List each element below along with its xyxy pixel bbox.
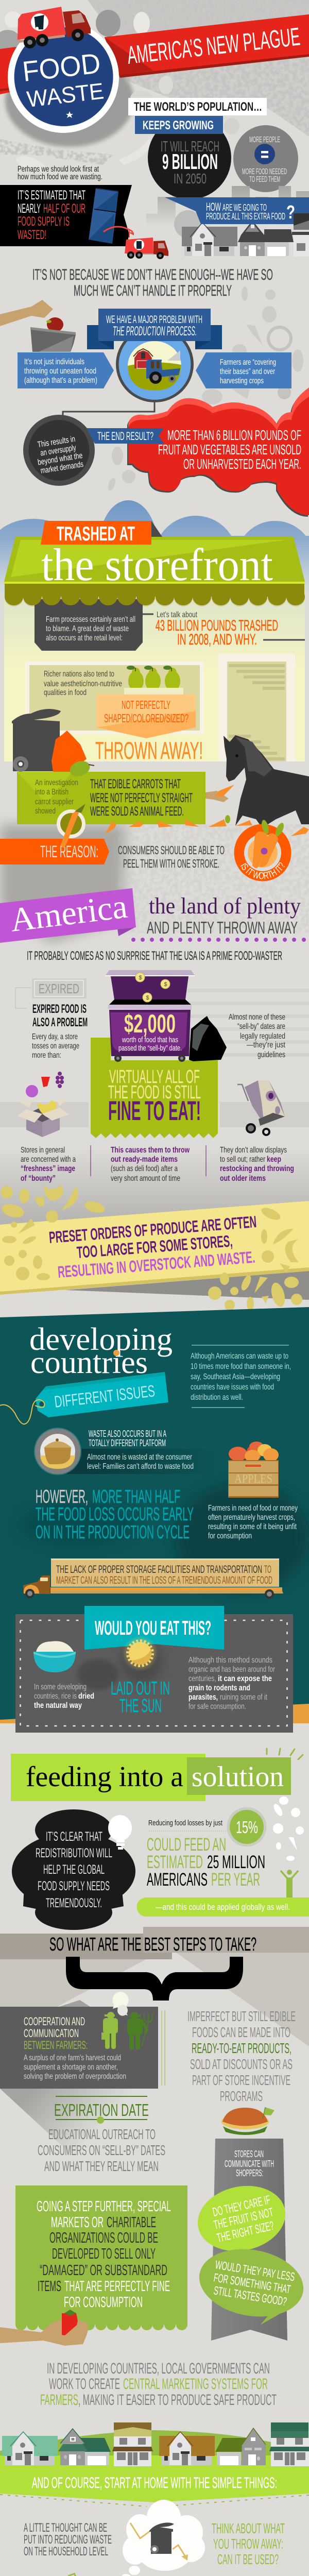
tag: the end result	[87, 428, 164, 444]
text: richer nations: qualities in food	[44, 688, 87, 697]
speech bubble: how are we going to produce: HOW	[206, 200, 221, 213]
stat: 15 percent could feed 25 million: PER YEAR	[211, 1870, 260, 1890]
panel: fine to eat: VIRTUALLY ALL OF	[109, 1066, 200, 1087]
section: carrots	[0, 709, 309, 947]
text: however, more than half: MORE THAN HALF	[92, 1486, 180, 1507]
panel: nearly half of food wasted: HALF OF OUR	[43, 201, 85, 216]
panel: carrots sold as animal feed: carrot supplier	[35, 798, 74, 806]
black circle: 9 billion	[148, 116, 231, 199]
stat: 15 percent could feed 25 million	[147, 1807, 267, 1890]
grey circle: more people equals more food: MORE PEOPLE	[249, 135, 280, 144]
text: rice dried	[34, 1683, 94, 1710]
tag: not perfectly shaped: NOT PERFECTLY	[122, 698, 170, 711]
grey circle: more people equals more food: TO FEED THEM	[249, 175, 280, 184]
text: however, more than half	[36, 1486, 194, 1543]
heading: trashed at	[41, 521, 162, 545]
stat: 15 percent could feed 25 million: 25 MILLION	[207, 1852, 265, 1872]
block: consumer level	[34, 1428, 217, 1475]
text: laid out in the sun	[111, 1677, 170, 1716]
stamp: expired: EXPIRED	[39, 981, 79, 996]
column: ready-made items: out ready-made items	[111, 1155, 178, 1164]
text: sell-by dates: guidelines	[258, 1050, 285, 1059]
text: consumers should	[118, 843, 225, 870]
text: central marketing systems: WORK TO CREATE	[49, 2376, 120, 2393]
text: expired food is also a problem: EXPIRED FOOD IS	[32, 1002, 87, 1016]
panel: special markets: CHARITABLE	[107, 2214, 156, 2231]
grey circle: more people equals more food	[233, 125, 298, 192]
text: expiration date: CONSUMERS ON “SELL-BY” DATES	[38, 2142, 165, 2158]
panel: nearly half of food wasted: WASTED!	[18, 228, 46, 242]
heading: feeding into a solution: solution	[192, 1761, 284, 1793]
head with lightbulb: FOOD SUPPLY NEEDS	[38, 1879, 110, 1893]
badge: is it worth it: IS IT WORTH IT?	[240, 862, 285, 879]
text: farmers in need: for consumption	[208, 1532, 252, 1540]
hills and houses	[0, 2422, 309, 2502]
badge: food waste	[8, 22, 119, 133]
text: however, more than half: HOWEVER,	[36, 1486, 88, 1507]
text: organic method: for safe consumption.	[188, 1702, 246, 1711]
text: perhaps we should look first: Perhaps we should look first at	[18, 165, 99, 174]
heading: developing countries: countries	[30, 1345, 148, 1380]
panel: would you eat this	[15, 1606, 293, 1733]
stat: 15 percent could feed 25 million: COULD FEED AN	[147, 1835, 226, 1855]
section: developing countries	[0, 1307, 309, 1733]
tag: not perfectly shaped	[97, 694, 196, 738]
panel: fine to eat: FINE TO EAT!	[108, 1096, 201, 1126]
house 1	[182, 223, 237, 256]
icon: pears in crate	[124, 666, 183, 697]
house: green two-storey	[269, 2422, 309, 2466]
heading: feeding into a solution: feeding into a	[26, 1761, 183, 1793]
text: sell-by dates: Almost none of these	[229, 1013, 285, 1022]
panel: nearly half of food wasted	[0, 185, 134, 246]
panel: special markets: GOING A STEP FURTHER, SPECIAL	[37, 2198, 171, 2215]
icons: white food silhouettes	[272, 1797, 304, 1861]
sign: farm processes: Farm processes certainly aren’t all	[46, 615, 135, 624]
icon: garbage truck	[18, 7, 91, 48]
column: freshness image: “freshness” image	[21, 1164, 75, 1173]
banner: stores can communicate	[192, 2107, 309, 2341]
icon: dumpster	[106, 970, 195, 1062]
grey stripes	[187, 989, 309, 1057]
block: consumer level: WASTE ALSO OCCURS BUT IN A	[89, 1429, 166, 1439]
panel: cooperation	[0, 1992, 158, 2089]
coins	[135, 973, 170, 1002]
banner: stores can communicate: STORES CAN	[234, 2149, 264, 2159]
block: consumer level: level: Families can’t afford to waste food	[87, 1462, 194, 1471]
icons: leftovers food	[34, 2573, 279, 2576]
house: brown	[159, 2431, 215, 2465]
text: a little thought: PUT INTO REDUCING WASTE	[24, 2533, 112, 2547]
text: laid out in the sun: THE SUN	[119, 1695, 162, 1716]
text: sell-by dates: —they’re just	[247, 1041, 285, 1049]
tag: different issues	[0, 1372, 168, 1424]
column: ready-made items: very short amount of time	[111, 1174, 180, 1183]
panel: it's not just individuals: It’s not just individuals	[24, 358, 84, 366]
text: richer nations: value aesthetic/non-nutritive	[44, 680, 122, 688]
panel: special markets: ITEMS	[38, 2278, 61, 2295]
text: expiration date: EXPIRATION DATE	[54, 2100, 149, 2120]
text: sell-by dates: legally regulated	[240, 1032, 285, 1041]
red cloud: end result	[127, 387, 309, 517]
heading: feeding into a solution	[11, 1749, 303, 1801]
head with lightbulb: IT’S CLEAR THAT	[46, 1829, 102, 1844]
text: rice dried: dried	[78, 1692, 94, 1701]
badge title	[21, 47, 105, 118]
panel: carrots sold as animal feed: WERE NOT PERFECTLY STRAIGHT	[90, 791, 193, 805]
house: grey with olive garage	[215, 2428, 266, 2465]
black circle: 9 billion: IN 2050	[174, 171, 207, 187]
text: organic method: it can expose the	[218, 1674, 272, 1683]
panel: farmers covering their bases: Farmers are “covering	[220, 358, 276, 367]
text: organic method: ruining some of it	[220, 1693, 267, 1702]
circle: oversupply: an oversupply	[40, 444, 77, 458]
text: richer nations	[44, 670, 122, 697]
house: mint	[2, 2431, 58, 2465]
clouds behind the store	[0, 500, 309, 602]
text: although Americans: say, Southeast Asia—developing	[191, 1372, 280, 1381]
text: a little thought: A LITTLE THOUGHT CAN BE	[24, 2521, 107, 2535]
text: rice dried: countries, rice is	[34, 1692, 77, 1701]
icon: bowl of rice	[33, 1641, 76, 1672]
icon: small garbage truck	[125, 238, 168, 259]
heading: land of plenty	[131, 893, 306, 942]
ribbon: America: America	[8, 888, 129, 939]
text: organic method: organic and has been around for	[188, 1665, 275, 1674]
text: although Americans: distribution as well.	[191, 1393, 243, 1402]
panel: cooperation: solving the problem of overproduction	[24, 2072, 126, 2081]
section: feeding into a solution	[0, 1749, 309, 2576]
banner: major problem with production	[87, 309, 222, 349]
icon: horse	[224, 735, 309, 828]
icon: bin with orange bag	[12, 709, 87, 772]
icon: dumpster: passed the “sell-by” date.	[118, 1044, 182, 1053]
icon: person	[281, 1870, 298, 1897]
stat: 15 percent could feed 25 million: Reducing food losses by just	[148, 1819, 223, 1827]
text: organic method: Although this method sounds	[188, 1656, 272, 1665]
grunge texture	[0, 0, 309, 165]
text: rice dried: In some developing	[34, 1683, 87, 1691]
truck: lack of storage	[23, 1558, 283, 1599]
text: imperfect but edible: PROGRAMS	[220, 2088, 263, 2104]
house: tan two-storey	[112, 2422, 153, 2466]
stat: 15 percent could feed 25 million: AMERICANS	[147, 1870, 208, 1890]
icon: trash bag	[189, 1016, 227, 1061]
stat: 15 percent could feed 25 million: 15%	[236, 1818, 258, 1837]
panel: nearly half of food wasted: NEARLY	[18, 201, 41, 216]
icon: crate of apples	[228, 1442, 279, 1498]
pill: applied globally	[137, 1897, 309, 1917]
column: restocking: out older items	[220, 1174, 266, 1183]
truck: lack of storage: TO	[264, 1564, 271, 1575]
icon: dumpster: worth of food that has	[122, 1036, 178, 1044]
head with lightbulb: REDISTRIBUTION WILL	[36, 1846, 112, 1860]
heading: trashed at: TRASHED AT	[57, 523, 135, 545]
block: consumer level: Almost none is wasted at the consumer	[87, 1453, 192, 1462]
text: laid out in the sun: LAID OUT IN	[111, 1677, 170, 1699]
speech bubble: how are we going to produce: ?	[286, 201, 295, 223]
text: perhaps we should look first	[18, 165, 102, 181]
panel: it's not just individuals: (although that’s a problem)	[24, 376, 97, 385]
text: a little thought: ON THE HOUSEHOLD LEVEL	[24, 2545, 108, 2558]
window: right	[218, 654, 295, 761]
section: the storefront	[0, 500, 309, 764]
panel: special markets: ORGANIZATIONS COULD BE	[49, 2230, 158, 2246]
panel: fine to eat: THE FOOD IS STILL	[108, 1081, 201, 1103]
dashed lines	[0, 2495, 309, 2506]
section: America	[0, 888, 309, 1236]
text: although Americans: countries have issues with food	[191, 1383, 274, 1392]
tag: different issues: DIFFERENT ISSUES	[54, 1381, 156, 1411]
chevron backdrop	[0, 1947, 309, 2046]
icon: fridge	[89, 188, 134, 244]
icon: pot	[34, 1428, 81, 1475]
text: perhaps we should look first: how much food we are wasting.	[18, 173, 102, 181]
icon: pie	[221, 2107, 274, 2135]
badge title: WASTE	[26, 78, 105, 112]
text: organic method: parasites,	[188, 1693, 218, 1702]
icon: curly brace	[66, 1957, 243, 2001]
sign: farm processes: also occurs at the retail level:	[46, 634, 123, 642]
stat: 15 percent could feed 25 million: ESTIMATED	[147, 1852, 203, 1872]
icon: hand dropping apple into bin	[0, 300, 76, 352]
coins: $	[139, 975, 142, 981]
connector lines	[63, 402, 154, 416]
icon: crate of apples: APPLES	[234, 1472, 272, 1486]
ribbon: America's new plague	[0, 14, 309, 94]
skyline and houses	[146, 186, 309, 257]
text: organic method: grain to rodents and	[188, 1684, 250, 1692]
tag: the end result: THE END RESULT?	[97, 430, 153, 443]
column: restocking: keep	[267, 1155, 281, 1164]
text: expired food is also a problem: tosses on average	[32, 1042, 79, 1050]
text: organic method	[188, 1656, 275, 1711]
coins: $	[146, 995, 149, 1001]
teal background	[0, 1704, 309, 1723]
panel: special markets	[0, 2185, 187, 2346]
badge: is it worth it	[234, 820, 291, 881]
sign: farm processes	[35, 599, 143, 651]
heading: land of plenty: the land of plenty	[149, 893, 301, 919]
panel: farmers covering their bases: harvesting crops	[220, 377, 264, 385]
text: central marketing systems: FARMERS	[40, 2392, 78, 2409]
black circle: 9 billion: 9 BILLION	[162, 149, 218, 174]
icon: hand feeding carrot	[205, 785, 234, 802]
text: $2,000: $2,000	[124, 1009, 176, 1038]
stat: 43 billion pounds	[143, 611, 305, 648]
speech bubble: how are we going to produce: ARE WE GOING TO	[222, 202, 267, 213]
panel: special markets: MARKETS OR	[51, 2214, 104, 2231]
heading: keeps growing	[135, 116, 223, 134]
icon: sun	[125, 1638, 156, 1669]
banner: stores can communicate: SHOPPERS:	[236, 2168, 263, 2178]
head with lightbulb: HELP THE GLOBAL	[43, 1862, 105, 1877]
coins: $	[164, 981, 167, 988]
panel: carrots sold as animal feed: WERE SOLD AS ANIMAL FEED.	[90, 804, 184, 819]
columns: store practices	[21, 1145, 294, 1183]
panel: cooperation: COOPERATION AND	[24, 2015, 85, 2028]
icon: hand with strawberry	[0, 2310, 89, 2346]
block: consumer level: TOTALLY DIFFERENT PLATFORM	[89, 1438, 166, 1448]
shadow triangle	[0, 2089, 158, 2162]
icon: carrot circle	[57, 804, 85, 838]
panel: carrots sold as animal feed	[17, 772, 205, 824]
text: sell-by dates	[229, 1013, 285, 1059]
grunge shading	[0, 824, 309, 943]
head with lightbulb	[12, 1809, 135, 1930]
column: ready-made items	[111, 1146, 190, 1183]
window: left	[25, 662, 204, 738]
text: central marketing systems	[40, 2360, 277, 2409]
store body	[4, 587, 305, 761]
column: restocking: They don’t allow displays	[220, 1146, 287, 1155]
banner: major problem with production: THE PRODUCTION PROCESS.	[113, 324, 197, 338]
panel: leftovers tip	[28, 2573, 281, 2576]
text: expired food is also a problem: Every day, a store	[32, 1032, 78, 1041]
stat: 43 billion pounds: Let’s talk about	[157, 611, 197, 619]
column: freshness image	[21, 1146, 76, 1183]
circle: oversupply: beyond what the	[37, 451, 83, 467]
icon: carrot	[61, 811, 79, 848]
column: ready-made items: (such as deli food) after a	[111, 1164, 178, 1173]
banner: so what are the best steps	[0, 1927, 309, 1959]
text: expiration date: AND WHAT THEY REALLY MEAN	[44, 2158, 159, 2174]
panel: cooperation: A surplus of one farm’s harvest could	[24, 2054, 121, 2062]
panel: cooperation: BETWEEN FARMERS:	[24, 2039, 88, 2052]
icons: grey vegetables	[107, 286, 303, 492]
text: rice dried: the natural way	[34, 1701, 82, 1710]
panel: carrots sold as animal feed: showed	[35, 807, 56, 816]
panel: special markets: FOR CONSUMPTION	[64, 2294, 143, 2311]
icon: box of produce	[18, 1072, 70, 1137]
column: ready-made items: This causes them to throw	[111, 1146, 190, 1155]
thought cloud with bin	[121, 2500, 205, 2576]
heading: developing countries: developing	[29, 1321, 173, 1357]
text: imperfect but edible	[162, 2008, 296, 2104]
black circle: 9 billion: IT WILL REACH	[161, 139, 219, 155]
ribbon: preset orders	[0, 1185, 309, 1310]
text: although Americans	[191, 1345, 291, 1408]
gradient backdrop to ribbon	[0, 1146, 309, 1236]
text: preset orders of produce	[48, 1212, 257, 1281]
tag: not perfectly shaped: SHAPED/COLORED/SIZED?	[104, 711, 188, 725]
panel: carrots sold as animal feed: into a British	[35, 788, 68, 796]
panel: nearly half of food wasted: IT’S ESTIMATED THAT	[18, 188, 85, 202]
text: expiration date: EDUCATIONAL OUTREACH TO	[48, 2126, 156, 2142]
panel: cooperation: COMMUNICATION	[24, 2027, 79, 2040]
sign: farm processes: to blame. A great deal of waste	[46, 624, 129, 633]
circle: oversupply: market demands	[40, 460, 84, 476]
icons: carrots on the ground	[105, 815, 309, 836]
panel: special markets: DEVELOPED TO SELL ONLY	[52, 2246, 156, 2262]
panel: farmers covering their bases: their bases” and over	[220, 367, 275, 376]
text: sell-by dates: “sell-by” dates are	[237, 1022, 285, 1031]
panel: nearly half of food wasted: FOOD SUPPLY IS	[18, 214, 70, 229]
heading: keeps growing: KEEPS GROWING	[143, 118, 214, 132]
icon: pear	[67, 758, 94, 779]
dark texture	[21, 1484, 309, 1592]
house: grey with green garage	[58, 2429, 111, 2465]
text: consumers should: PEEL THEM WITH ONE STROKE.	[123, 857, 219, 870]
section: America: ALSO A PROBLEM	[32, 1015, 88, 1029]
speech bubble: how are we going to produce	[165, 197, 309, 224]
text: thrown away: THROWN AWAY!	[95, 737, 203, 764]
text: expired food is also a problem: more than:	[32, 1051, 61, 1060]
stamp: expired	[15, 978, 87, 1008]
column: restocking	[220, 1146, 294, 1183]
column: freshness image: are concerned with a	[21, 1155, 76, 1164]
icon: farmers talking	[101, 1992, 152, 2049]
circle: oversupply: This results in	[37, 435, 76, 449]
icon: arrows and bin	[130, 2522, 188, 2561]
panel: it's not just individuals: throwing out uneaten food	[24, 367, 96, 376]
section: header	[0, 0, 309, 259]
text: organic method: centuries,	[188, 1674, 216, 1683]
heading: the storefront: the storefront	[41, 540, 273, 590]
icons: food silhouettes	[1, 1185, 302, 1310]
panel: special markets: THAT ARE PERFECTLY FINE	[64, 2278, 170, 2295]
house 3	[292, 213, 309, 257]
panel: carrots sold as animal feed: An investigation	[35, 778, 78, 787]
panel: farmers covering their bases	[196, 352, 291, 388]
bands behind icons	[0, 1102, 309, 1127]
panel: it's not just individuals	[18, 352, 114, 388]
heading: it's not because	[32, 266, 273, 299]
icon: hand truck with boxes	[237, 1080, 285, 1136]
icons: faint food silhouettes	[5, 11, 239, 175]
heading: developing countries	[29, 1321, 173, 1380]
panel: carrots sold as animal feed: THAT EDIBLE CARROTS THAT	[90, 777, 181, 791]
badge title: FOOD	[21, 47, 102, 88]
panel: fine to eat	[91, 1038, 218, 1138]
awning	[4, 537, 305, 651]
banner: major problem with production: WE HAVE A MAJOR PROBLEM WITH	[106, 314, 202, 326]
column: freshness image: of “bounty”	[21, 1174, 56, 1183]
circle: oversupply	[23, 415, 95, 486]
text: expired food is also a problem	[32, 1002, 88, 1060]
panel: special markets: “DAMAGED” OR SUBSTANDARD	[40, 2262, 167, 2279]
text: expiration date	[38, 2096, 165, 2174]
icon: farm circle	[116, 326, 194, 402]
heading: the world's population	[128, 98, 267, 115]
tag: the reason: THE REASON:	[40, 842, 98, 861]
speech bubble: right size	[192, 2178, 291, 2259]
head with lightbulb: TREMENDOUSLY.	[46, 1896, 102, 1910]
text: richer nations: Richer nations also tend to	[44, 670, 114, 679]
speech bubble: pay less	[194, 2241, 309, 2325]
house 2	[238, 221, 294, 256]
text: farmers in need	[208, 1504, 298, 1540]
text: a little thought	[24, 2521, 112, 2558]
column: freshness image: Stores in general	[21, 1146, 65, 1155]
text: think about what you throw away	[212, 2520, 285, 2567]
tag: the reason	[0, 839, 109, 865]
banner	[84, 1606, 224, 1650]
panel: cooperation: supplement a shortage on another,	[24, 2063, 118, 2072]
column: restocking: to sell out; rather	[220, 1155, 265, 1164]
